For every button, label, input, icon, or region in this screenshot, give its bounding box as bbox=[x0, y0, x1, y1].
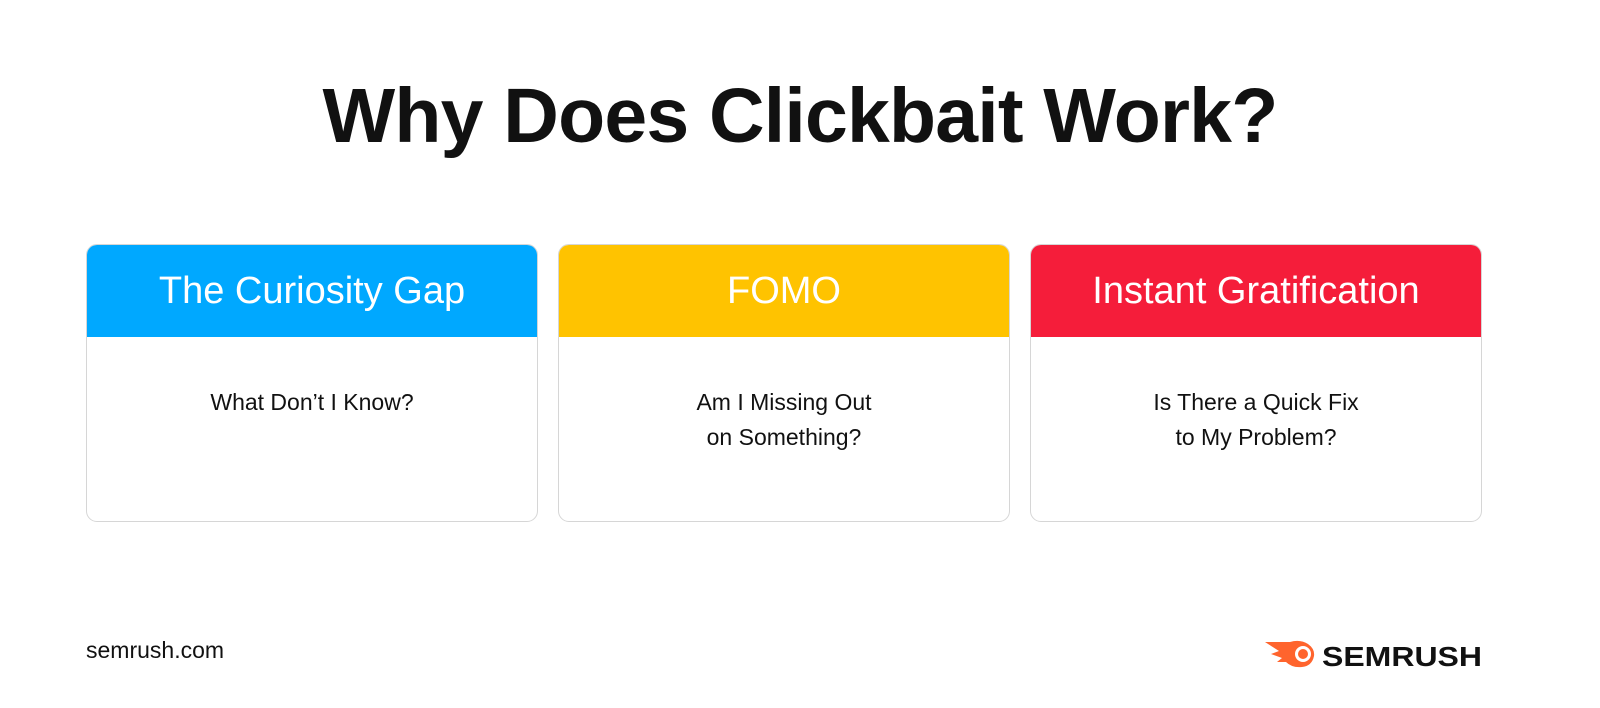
text: gratification question bbox=[1153, 389, 1359, 450]
text: curiosity question: What Don’t I Know? bbox=[210, 389, 414, 415]
title: Why Does Clickbait Work? bbox=[323, 73, 1277, 159]
text: fomo question: Am I Missing Out bbox=[696, 389, 872, 415]
logo: semrush: SEMRUSH bbox=[1322, 641, 1482, 672]
header: curiosity gap: The Curiosity Gap bbox=[159, 270, 465, 312]
text: fomo question: on Something? bbox=[707, 424, 861, 450]
footer url: semrush.com bbox=[86, 637, 224, 663]
text: fomo question bbox=[696, 389, 872, 450]
panel: fomo bbox=[558, 244, 1010, 522]
header: instant gratification bbox=[1031, 245, 1481, 337]
header: instant gratification: Instant Gratification bbox=[1092, 270, 1420, 312]
header: curiosity gap bbox=[87, 245, 537, 337]
logo: semrush bbox=[1265, 640, 1482, 672]
panel: curiosity gap bbox=[86, 244, 538, 522]
header: fomo: FOMO bbox=[727, 270, 841, 312]
text: gratification question: Is There a Quick Fix bbox=[1153, 389, 1359, 415]
header: fomo bbox=[559, 245, 1009, 337]
panel: instant gratification bbox=[1030, 244, 1482, 522]
text: gratification question: to My Problem? bbox=[1175, 424, 1337, 450]
